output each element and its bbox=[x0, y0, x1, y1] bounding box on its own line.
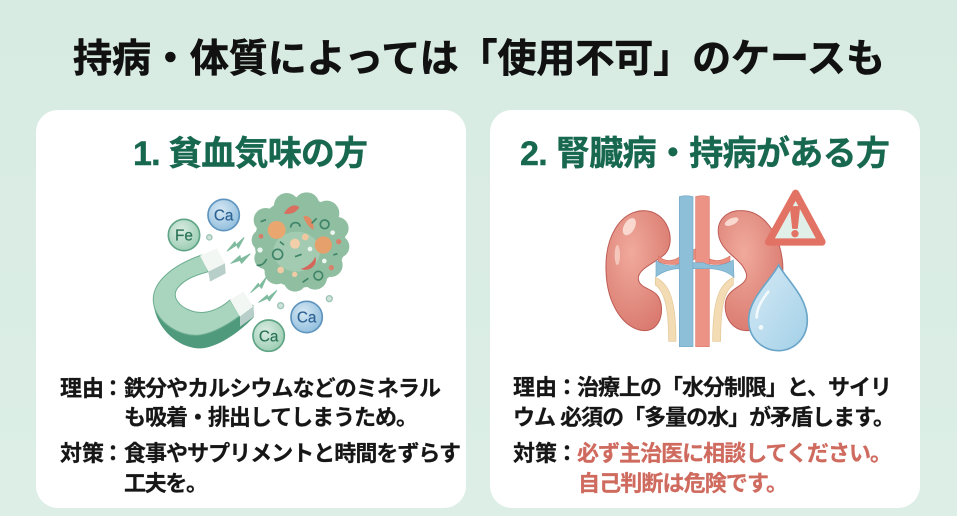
title: 持病・体質によっては「使用不可」のケースも bbox=[73, 38, 885, 81]
mineral: Ca blue top bbox=[208, 199, 239, 231]
heading: kidney disease: 2. 腎臓病・持病がある方 bbox=[520, 134, 890, 173]
text: reason: も吸着・排出してしまうため。 bbox=[124, 405, 418, 430]
water drop bbox=[749, 265, 807, 351]
particle cloud bbox=[252, 192, 349, 292]
warning triangle bbox=[769, 193, 822, 242]
right kidney bbox=[718, 211, 783, 331]
mineral: Ca blue bottom: Ca bbox=[297, 310, 317, 327]
panel: kidney disease bbox=[490, 110, 920, 508]
text: countermeasure bbox=[60, 441, 461, 496]
panel: anemia bbox=[36, 110, 466, 508]
text: countermeasure: 食事やサプリメントと時間をずらす bbox=[124, 441, 461, 466]
text: reason: ： bbox=[556, 375, 578, 400]
text: reason bbox=[513, 375, 895, 430]
ureters bbox=[655, 277, 733, 341]
aorta bbox=[696, 196, 709, 347]
text: reason: ウム 必須の「多量の水」が矛盾します。 bbox=[513, 405, 895, 430]
renal arteries bbox=[658, 248, 730, 264]
mineral: Ca green: Ca bbox=[259, 328, 279, 345]
left kidney bbox=[606, 211, 670, 331]
magnet bbox=[153, 248, 254, 348]
heading: anemia: 1. 貧血気味の方 bbox=[133, 135, 368, 173]
text: countermeasure: 対策 bbox=[60, 441, 104, 466]
text: reason: 理由 bbox=[60, 376, 104, 401]
text: countermeasure: 対策 bbox=[513, 441, 557, 466]
text: countermeasure: ： bbox=[556, 441, 578, 466]
vena cava bbox=[679, 196, 693, 347]
text: countermeasure: 工夫を。 bbox=[124, 471, 208, 496]
text: countermeasure bbox=[513, 441, 892, 496]
text: reason: 鉄分やカルシウムなどのミネラル bbox=[124, 376, 441, 401]
sparks bbox=[227, 238, 277, 302]
mineral: Fe bbox=[168, 219, 200, 251]
renal veins bbox=[656, 260, 734, 277]
text: reason: 治療上の「水分制限」と、サイリ bbox=[577, 375, 892, 400]
text: countermeasure: 自己判断は危険です。 bbox=[578, 471, 788, 496]
small dots bbox=[207, 235, 332, 309]
text: reason: 理由 bbox=[513, 375, 557, 400]
text: countermeasure: ： bbox=[102, 441, 124, 466]
mineral: Ca green bbox=[253, 320, 284, 351]
mineral: Ca blue bottom bbox=[291, 301, 322, 333]
text: countermeasure: 必ず主治医に相談してください。 bbox=[577, 441, 892, 466]
text: reason bbox=[60, 376, 441, 430]
text: reason: ： bbox=[102, 376, 124, 401]
mineral: Ca blue top: Ca bbox=[214, 208, 234, 225]
icon: kidneys with warning and water drop bbox=[606, 193, 822, 351]
mineral: Fe: Fe bbox=[175, 228, 193, 245]
icon: magnet attracting minerals bbox=[153, 192, 349, 351]
